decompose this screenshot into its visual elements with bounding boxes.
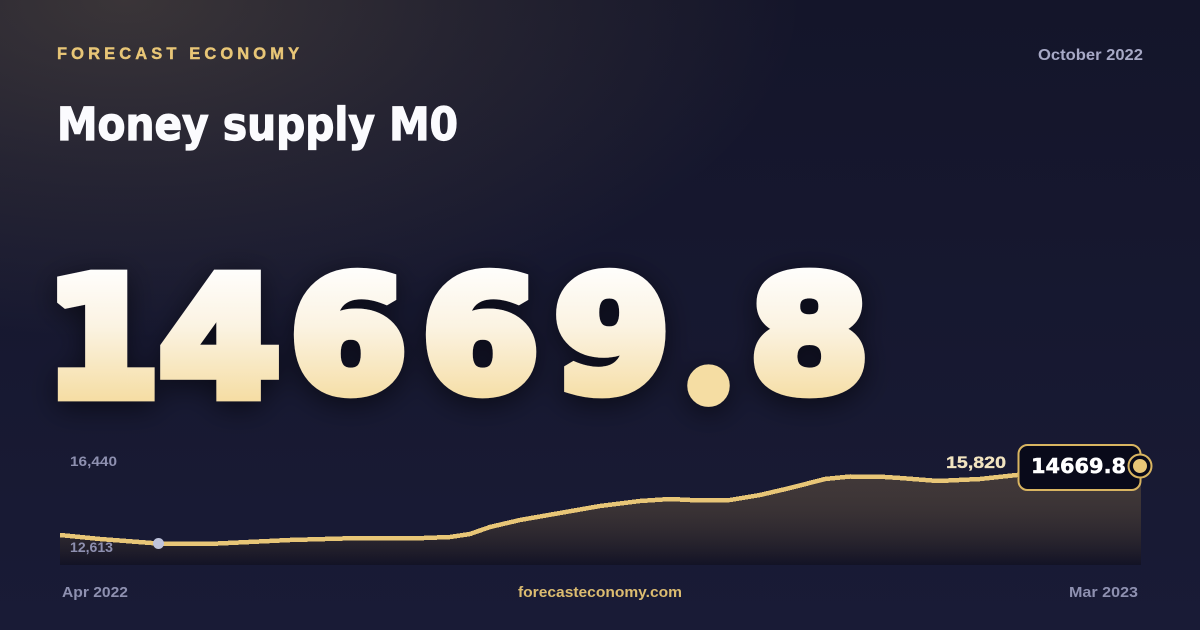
current value callout	[1018, 445, 1140, 490]
peak label: 15,820	[946, 453, 1006, 472]
big value: 9	[554, 245, 670, 428]
title: Money supply M0	[57, 98, 458, 151]
big value: .	[684, 222, 734, 443]
big value: 6	[290, 245, 407, 428]
chart area fill	[60, 466, 1141, 565]
big value: 8	[750, 245, 869, 427]
axis max label: 16,440	[70, 454, 117, 469]
end date: Mar 2023	[1069, 584, 1138, 601]
area chart	[60, 466, 1141, 565]
current point marker	[1128, 454, 1152, 478]
big value: 4	[159, 244, 280, 434]
low point marker	[153, 538, 164, 549]
start date: Apr 2022	[62, 584, 128, 601]
big value: 1	[45, 244, 159, 434]
current value callout: 14669.8	[1031, 454, 1126, 478]
website: forecasteconomy.com	[518, 584, 682, 601]
chart line	[60, 466, 1140, 544]
date: October 2022	[1038, 47, 1143, 64]
big value	[45, 222, 869, 443]
axis min label: 12,613	[70, 540, 114, 555]
brand label: FORECAST ECONOMY	[57, 45, 303, 63]
big value: 6	[422, 245, 539, 428]
